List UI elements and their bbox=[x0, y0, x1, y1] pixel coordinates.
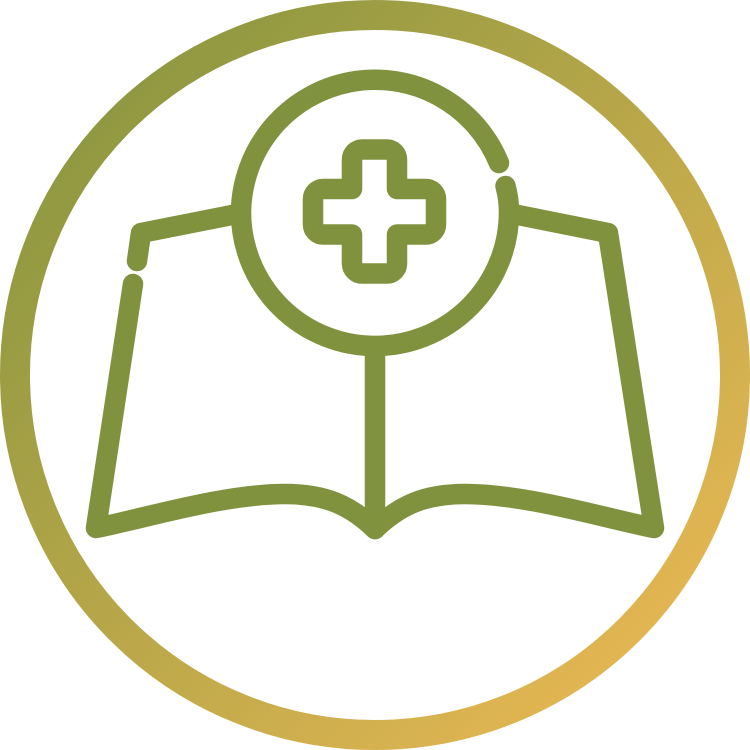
magnifier lens bbox=[241, 80, 509, 346]
icon: open book with magnifier and cross bbox=[96, 80, 654, 529]
book right page bbox=[375, 215, 654, 529]
magnifier handle bbox=[365, 346, 385, 529]
book left top edge bbox=[137, 215, 232, 261]
book left page bbox=[96, 284, 375, 529]
medical cross bbox=[313, 150, 436, 274]
